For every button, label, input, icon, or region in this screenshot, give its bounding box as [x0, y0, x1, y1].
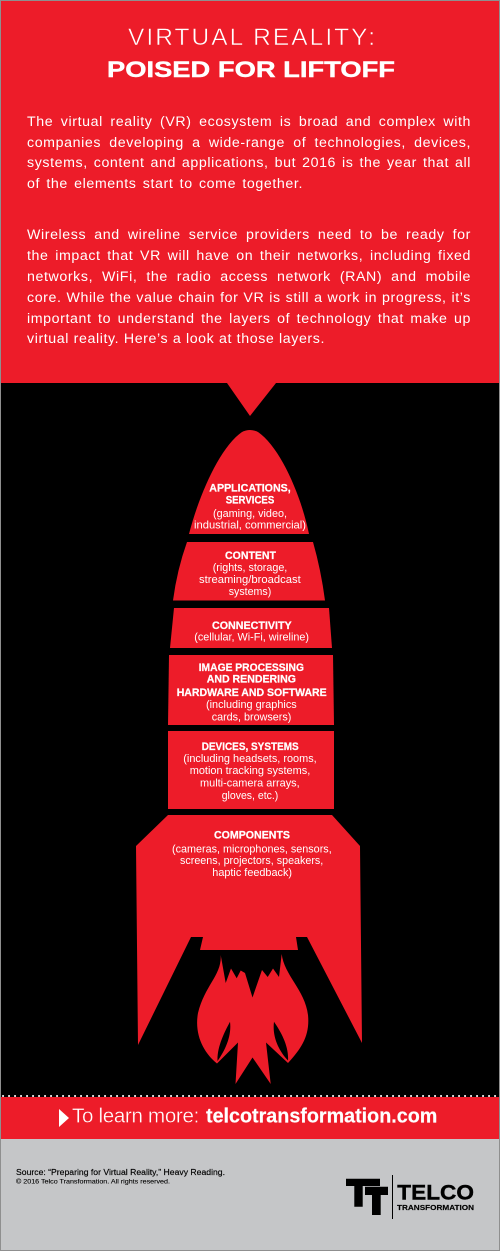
- logo: Telco Transformation: [346, 1175, 474, 1219]
- call to action text: [72, 1105, 437, 1128]
- rocket layer: devices, systems: multi-camera arrays,: [200, 778, 300, 790]
- rocket base with fins: components: haptic feedback): [212, 867, 292, 879]
- rocket layer: devices, systems: [168, 731, 334, 809]
- rocket nose: applications, services: [189, 430, 309, 534]
- header panel with pointer: [1, 1, 499, 416]
- rocket layer: content: CONTENT: [225, 550, 276, 562]
- rocket layer: devices, systems: (including headsets, rooms,: [183, 753, 317, 765]
- rocket layer: devices, systems: motion tracking systems,: [190, 765, 310, 777]
- rocket layer: connectivity: CONNECTIVITY: [212, 620, 292, 632]
- rocket base with fins: components: screens, projectors, speakers,: [180, 855, 323, 867]
- rocket layer: image processing: (including graphics: [206, 699, 297, 711]
- rocket base with fins: components: (cameras, microphones, sensors,: [172, 843, 332, 855]
- rocket layer: devices, systems: DEVICES, SYSTEMS: [202, 741, 299, 753]
- rocket layer: image processing: cards, browsers): [212, 712, 291, 724]
- call to action text: telcotransformation.com: [206, 1106, 437, 1128]
- intro paragraph 1: companies developing a wide-range of technologies, devices,: [27, 134, 471, 150]
- rocket layer: content: streaming/broadcast: [199, 574, 301, 586]
- intro paragraph 2: core. While the value chain for VR is still a work in progress, it’s: [27, 290, 471, 306]
- intro paragraph 2: networks, WiFi, the radio access network (RAN) and mobile: [27, 269, 471, 285]
- intro paragraph 2: Wireless and wireline service providers need to be ready for: [27, 227, 471, 243]
- rocket base with fins: components: [136, 815, 362, 1045]
- rocket layer: content: (rights, storage,: [213, 562, 287, 574]
- rocket layer: image processing: AND RENDERING: [207, 674, 296, 686]
- logo: Telco Transformation: TRANSFORMATION: [397, 1203, 474, 1212]
- logo: Telco Transformation: TELCO: [397, 1181, 474, 1204]
- rocket nose: applications, services: (gaming, video,: [213, 508, 287, 520]
- rocket base with fins: components: COMPONENTS: [214, 830, 290, 842]
- call to action band: [1, 1097, 499, 1139]
- rocket layer: connectivity: [170, 608, 332, 648]
- footer panel: [1, 1139, 499, 1250]
- rocket layer: devices, systems: gloves, etc.): [222, 790, 278, 802]
- title: VIRTUAL REALITY:: [128, 24, 375, 51]
- intro paragraph 1: systems, content and applications, but 2016 is the year that all: [27, 155, 471, 171]
- rocket nose: applications, services: APPLICATIONS,: [209, 483, 291, 495]
- icon: arrow: [59, 1109, 69, 1127]
- intro paragraph 1: [27, 114, 471, 192]
- source note: © 2016 Telco Transformation. All rights reserved.: [16, 1178, 170, 1186]
- rocket nose: applications, services: SERVICES: [226, 495, 274, 507]
- rocket layer: image processing: IMAGE PROCESSING: [199, 662, 304, 674]
- intro paragraph 2: the impact that VR will have on their networks, including fixed: [27, 248, 471, 264]
- dotted divider: [3, 1095, 497, 1097]
- title: [107, 24, 395, 82]
- source note: [16, 1168, 225, 1186]
- rocket layer: content: [173, 542, 325, 600]
- rocket illustration: [136, 430, 362, 1084]
- intro paragraph 1: The virtual reality (VR) ecosystem is broad and complex with: [27, 114, 471, 130]
- icon: rocket flame: [197, 954, 308, 1084]
- rocket layer: image processing: HARDWARE AND SOFTWARE: [177, 687, 327, 699]
- rocket layer: image processing: [168, 655, 334, 725]
- source note: Source: “Preparing for Virtual Reality,” Heavy Reading.: [16, 1168, 225, 1177]
- title: POISED FOR LIFTOFF: [107, 57, 395, 82]
- intro paragraph 2: [27, 227, 471, 347]
- intro paragraph 1: of the elements start to come together.: [27, 176, 303, 192]
- rocket layer: content: systems): [229, 586, 271, 598]
- intro paragraph 2: virtual reality. Here’s a look at those layers.: [27, 331, 325, 347]
- rocket layer: connectivity: (cellular, Wi-Fi, wireline): [194, 632, 309, 644]
- call to action text: To learn more:: [72, 1105, 199, 1128]
- rocket nose: applications, services: industrial, commercial): [194, 520, 306, 532]
- intro paragraph 2: important to understand the layers of technology that make up: [27, 310, 471, 326]
